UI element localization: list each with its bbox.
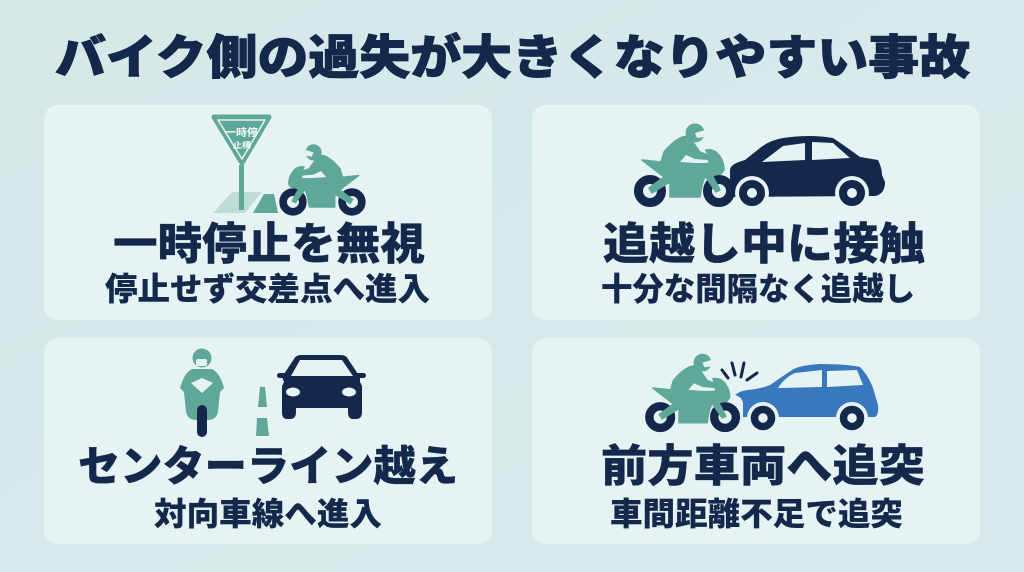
panel: 一時停止を無視 [44,105,492,320]
subheading: 対向車線へ進入 [154,496,382,532]
icon: cone [256,387,269,436]
icon: car front view [277,355,366,419]
icon: motorcycle front view [180,348,224,437]
title: バイク側の過失が大きくなりやすい事故 [55,31,970,84]
icon: motorcycle [283,144,362,212]
icon: impact lines [722,363,757,380]
icon: motorcycle [638,124,730,202]
panel: センターライン越え [44,338,492,544]
icon: blue car [735,364,878,434]
subheading: 十分な間隔なく追越し [601,271,915,307]
icon: stop sign [213,117,278,213]
heading: 追越し中に接触 [603,220,925,269]
heading: 一時停止を無視 [113,220,425,269]
icon: stop sign: 止標 [233,140,251,150]
subheading: 停止せず交差点へ進入 [105,271,430,307]
panel: 前方車両へ追突 [532,338,980,544]
heading: センターライン越え [78,443,458,490]
icon: stop sign: 一時停 [225,126,258,139]
subheading: 車間距離不足で追突 [610,496,903,532]
icon: car [730,136,885,210]
icon: motorcycle [649,354,736,428]
heading: 前方車両へ追突 [601,442,925,491]
panel: 追越し中に接触 [532,105,980,320]
